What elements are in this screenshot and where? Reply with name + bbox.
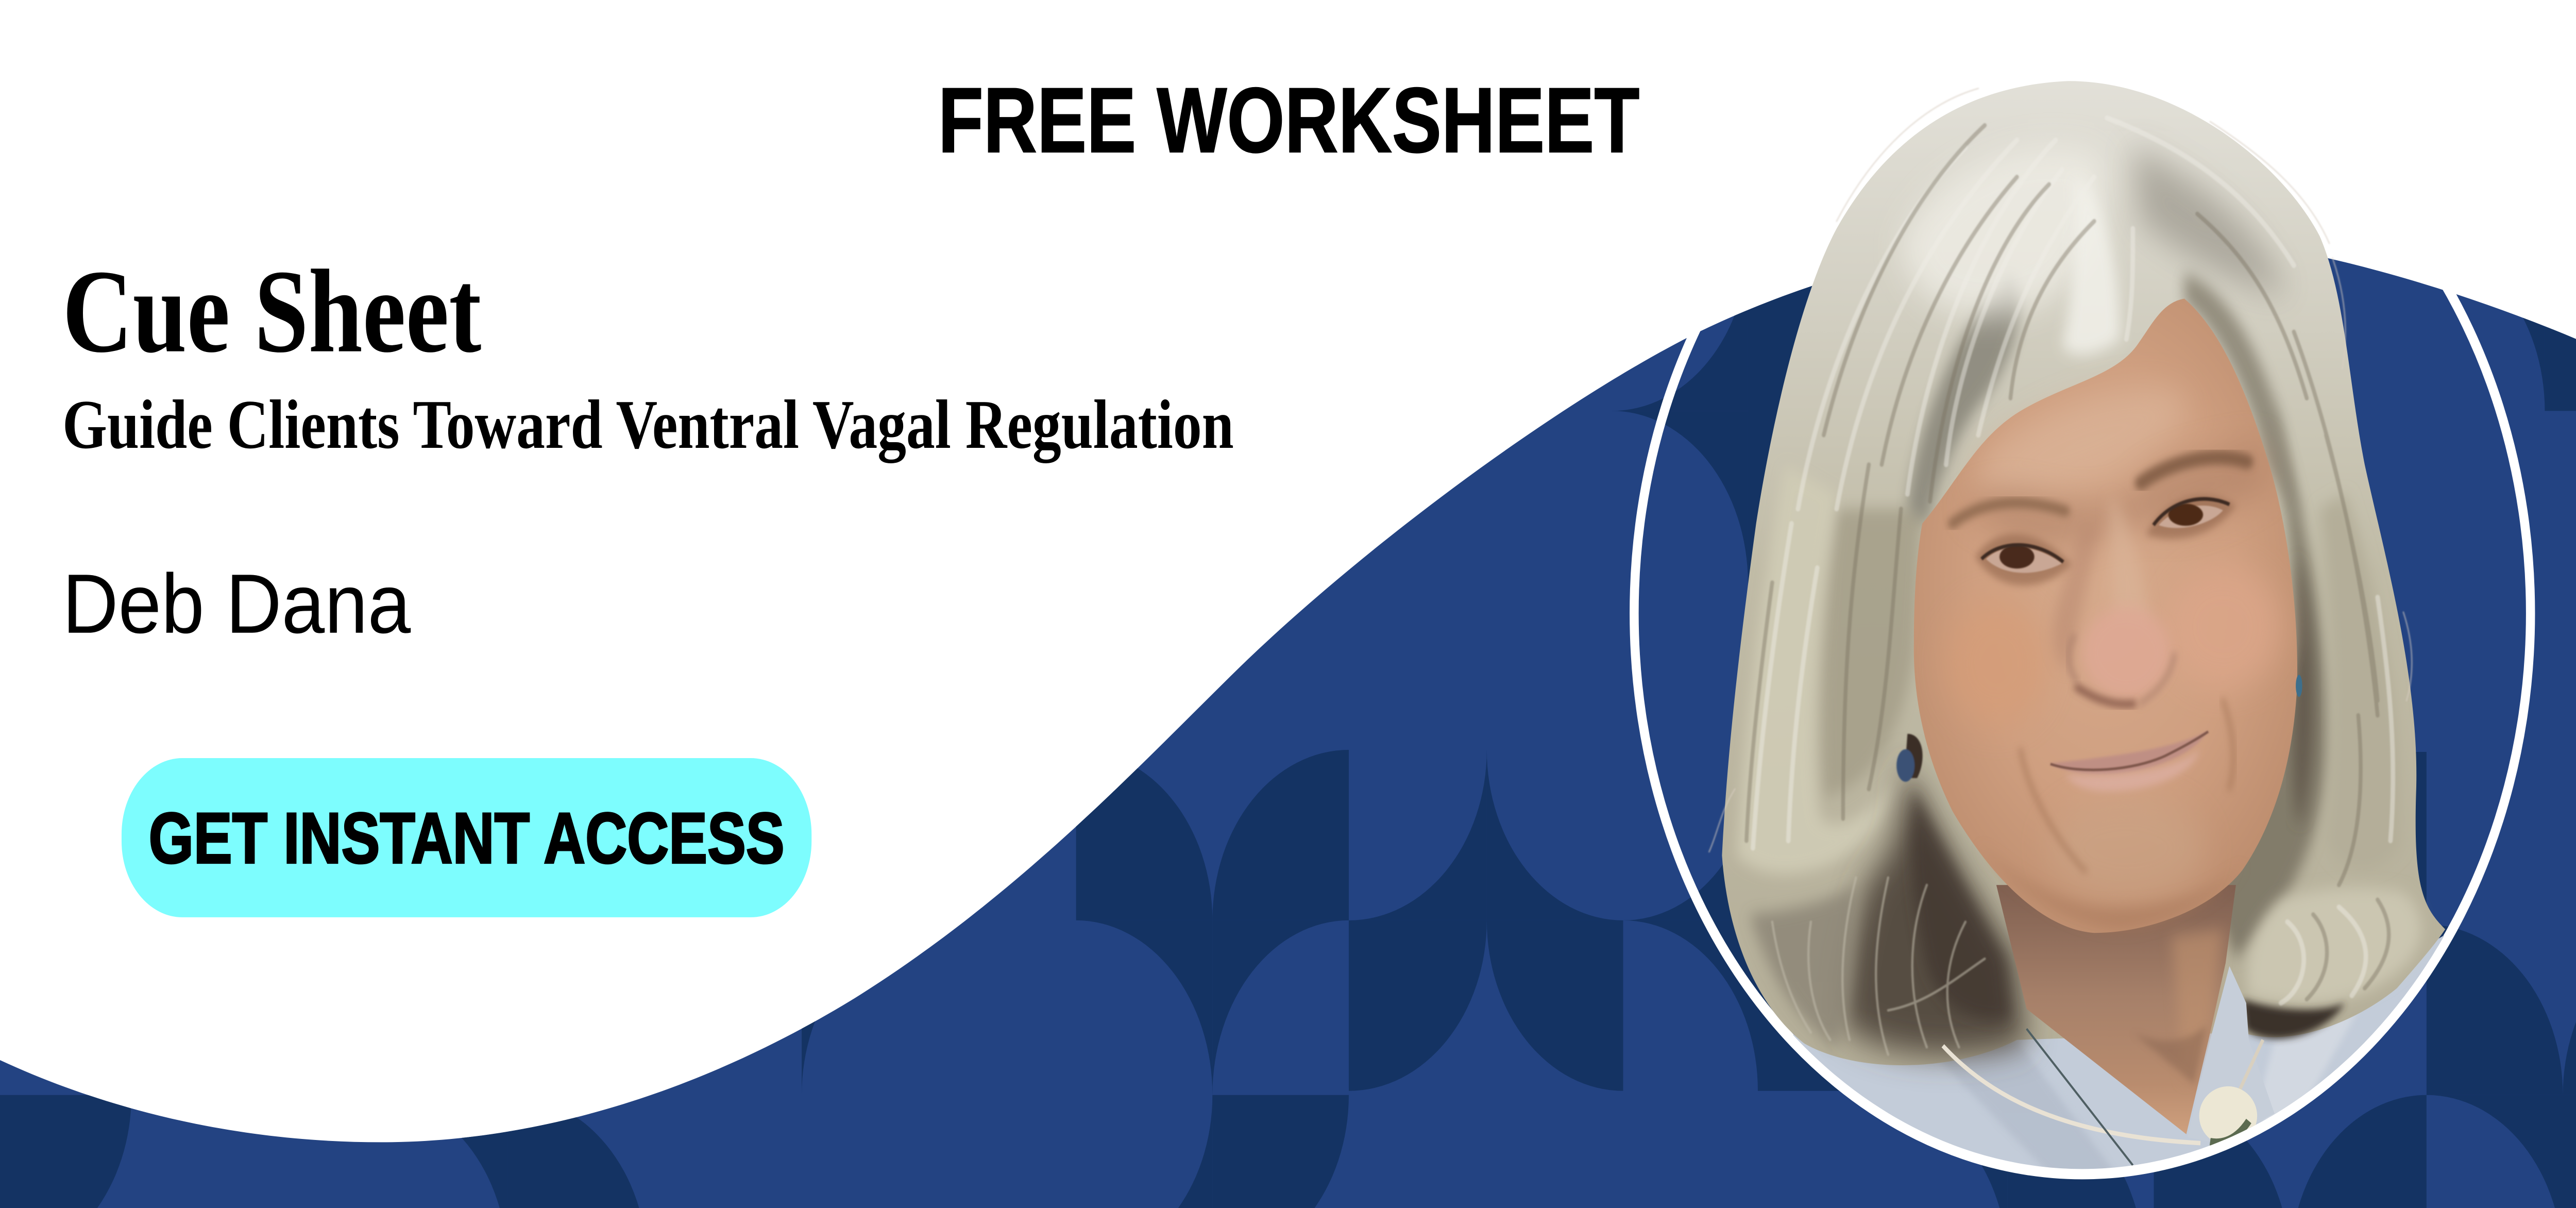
icon: left eye [1975,534,2072,585]
shirt [1793,935,2445,1169]
icon: nose [2069,607,2175,704]
hair [1722,81,2445,1065]
hair strands [1709,89,2412,1054]
necklace [1943,1029,2263,1165]
icon: right earring [2296,675,2302,697]
portrait photo [1709,81,2468,1208]
title: Cue Sheet [62,245,481,377]
button: get instant access: GET INSTANT ACCESS [149,798,785,878]
shirt panel at right of neck [2206,966,2274,1118]
icon: left eyebrow [1953,503,2065,524]
icon: mouth [2050,732,2208,791]
button: get instant access [122,758,811,917]
author: Deb Dana [62,557,411,651]
badge: free worksheet: FREE WORKSHEET [938,69,1639,172]
portrait ring [1634,53,2531,1173]
icon: right eye [2146,496,2236,539]
face [1914,298,2297,933]
subtitle: Guide Clients Toward Ventral Vagal Regulation [62,386,1234,463]
neck [1996,885,2236,1134]
icon: right eyebrow [2141,458,2247,483]
icon: left earring [1896,734,1923,782]
